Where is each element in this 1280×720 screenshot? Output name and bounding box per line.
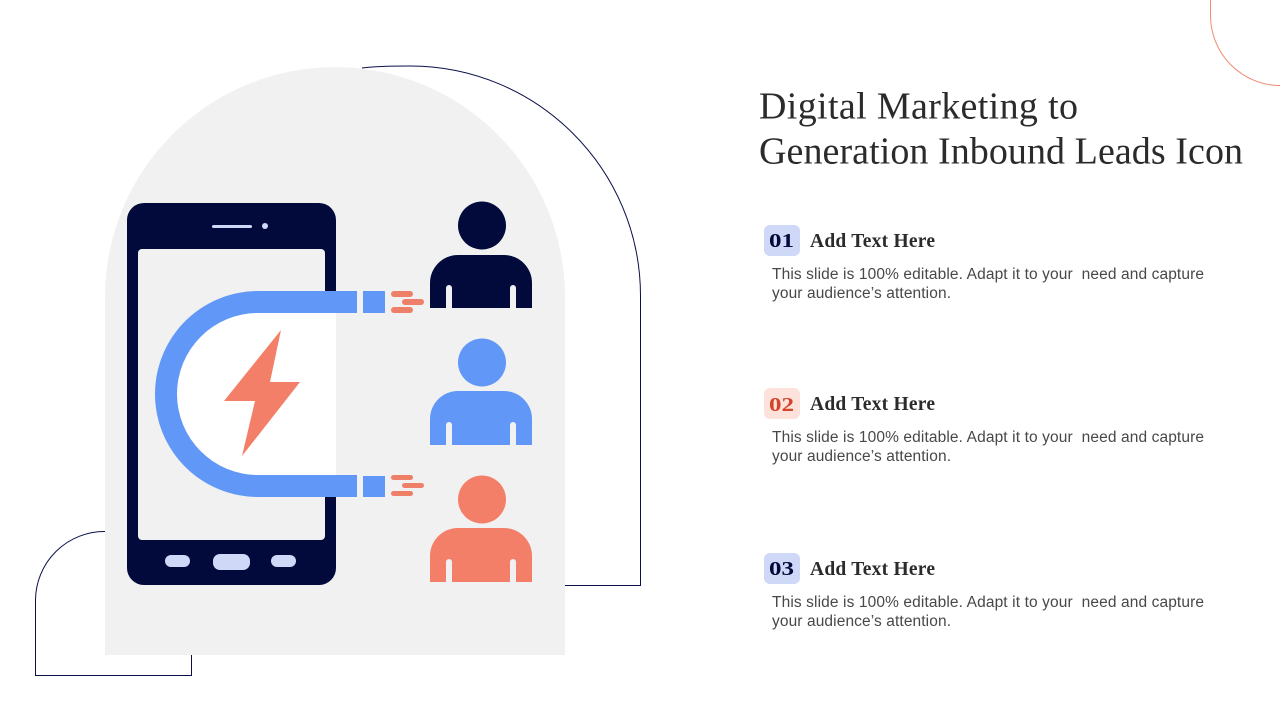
icon: person coral [430,476,532,582]
title: Digital Marketing to [759,86,1078,128]
heading 01: Add Text Here [810,231,935,252]
icon: magnet [155,291,385,497]
body text 01 [772,266,1204,302]
icon: smartphone [127,203,336,585]
item 02 [764,388,1204,465]
icon: attraction lines bottom [391,475,424,496]
body text 01: your audience’s attention. [772,285,951,302]
body text 03: This slide is 100% editable. Adapt it to your need and capture [772,594,1204,611]
body text 02: your audience’s attention. [772,448,951,465]
badge 02 [764,388,800,419]
item 01 [764,225,1204,302]
body text 01: This slide is 100% editable. Adapt it to your need and capture [772,266,1204,283]
item 03 [764,553,1204,630]
outline arch: behind panel right [362,66,640,586]
heading 02: Add Text Here [810,394,935,415]
corner arc: top right [1210,0,1280,86]
badge 02: 02 [769,394,794,416]
outline arch: bottom left [36,531,192,676]
badge 03: 03 [769,558,794,580]
icon: person blue [430,338,532,445]
icon: attraction lines top [391,291,424,313]
title: Generation Inbound Leads Icon [759,130,1243,172]
heading 03: Add Text Here [810,559,935,580]
body text 02 [772,429,1204,465]
badge 01 [764,225,800,256]
title [759,86,1243,172]
body text 03 [772,594,1204,630]
body text 02: This slide is 100% editable. Adapt it to your need and capture [772,429,1204,446]
badge 01: 01 [769,230,794,252]
body text 03: your audience’s attention. [772,613,951,630]
icon: lightning bolt [224,330,300,456]
icon: person navy [430,202,532,308]
panel: grey arch background [105,67,565,655]
badge 03 [764,553,800,584]
